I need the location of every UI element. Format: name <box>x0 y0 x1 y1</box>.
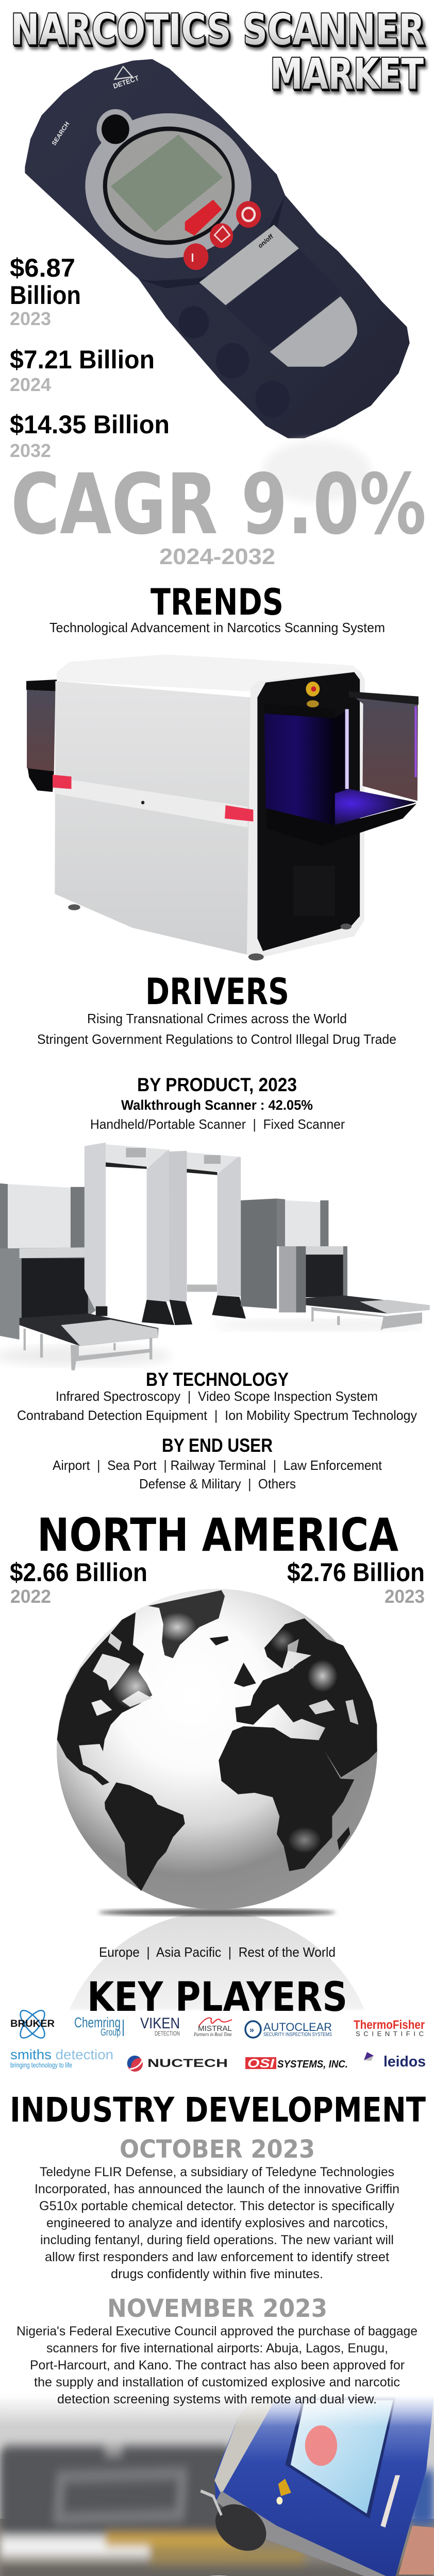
logo: mistral: Partners in Real Time <box>193 2032 232 2038</box>
logo: mistral <box>193 2018 232 2038</box>
globe reflection and shadow <box>57 1909 377 2232</box>
logo: leidos: leidos <box>383 2054 426 2070</box>
logo: osi systems: SYSTEMS, INC. <box>277 2059 348 2070</box>
trend text: Technological Advancement in Narcotics Scanning System <box>49 620 385 635</box>
by product section: Walkthrough Scanner : 42.05% <box>121 1097 313 1113</box>
by product section: Handheld/Portable Scanner | Fixed Scanner <box>90 1116 345 1132</box>
logo: smiths detection: smiths detection <box>10 2047 113 2062</box>
development: october 2023: engineered to analyze and identify explosives and narcotics, <box>46 2216 388 2230</box>
stat: 2023 market size: $6.87 <box>10 253 75 282</box>
land: south america <box>105 1783 185 1891</box>
lower panels <box>199 225 299 305</box>
cagr: 2024-2032 <box>159 544 275 569</box>
gate 2 <box>187 1153 241 1174</box>
logo: chemring: Chemring <box>74 2014 121 2030</box>
other regions: Europe | Asia Pacific | Rest of the World <box>99 1944 336 1960</box>
logo: thermo fisher: SCIENTIFIC <box>356 2030 424 2038</box>
by end user section: Airport | Sea Port | Railway Terminal | Law Enforcement <box>53 1458 382 1473</box>
development: november 2023: scanners for five international airports: Abuja, Lagos, Enugu, <box>46 2341 388 2355</box>
red indicator lights <box>53 775 253 822</box>
development: october 2023: allow first responders and law enforcement to identify street <box>45 2250 389 2264</box>
development: november 2023: the supply and installation of customized explosive and narcotic <box>34 2375 400 2389</box>
stat: north america 2022: 2022 <box>10 1586 51 1607</box>
left machine <box>0 1183 8 1249</box>
image: handheld narcotics scanner device <box>25 59 410 438</box>
logo: nuctech: NUCTECH <box>147 2057 228 2070</box>
land: uk <box>234 1663 256 1687</box>
development: november 2023 <box>16 2294 418 2406</box>
stat: 2023 market size <box>10 253 81 329</box>
right machine <box>241 1198 277 1309</box>
logo: smiths detection: bringing technology to life <box>10 2061 72 2069</box>
image: handheld narcotics scanner device: DETECT <box>112 74 140 90</box>
logo: leidos <box>364 2052 426 2070</box>
logo: bruker <box>10 2007 55 2042</box>
development: november 2023: Nigeria's Federal Executive Council approved the purchase of baggage <box>16 2324 418 2338</box>
land: greenland <box>148 1590 225 1658</box>
red button bar <box>185 199 222 235</box>
stat: 2023 market size: Billion <box>10 281 81 310</box>
by end user section <box>53 1435 382 1492</box>
by technology section: Infrared Spectroscopy | Video Scope Inspection System <box>56 1388 378 1404</box>
logo: viken: VIKEN <box>140 2015 180 2032</box>
image: handheld narcotics scanner device: I <box>191 251 194 264</box>
round red buttons <box>183 201 261 270</box>
land: africa <box>219 1726 354 1871</box>
stat: north america 2023 <box>287 1558 425 1607</box>
logo: autoclear: SECURITY INSPECTION SYSTEMS <box>263 2032 332 2038</box>
hudson bay and lakes <box>93 1654 130 1691</box>
development: november 2023: Port-Harcourt, and Kano. The contract has also been approved for <box>30 2358 405 2372</box>
development: october 2023: G510x portable chemical detector. This detector is specifically <box>39 2199 395 2213</box>
heading: drivers: DRIVERS <box>145 971 289 1013</box>
stat: north america 2023: 2023 <box>385 1586 425 1607</box>
logo: viken <box>140 2015 180 2037</box>
image: x-ray baggage scanner <box>26 654 419 960</box>
logo: osi systems <box>245 2057 348 2071</box>
logo: viken: DETECTION <box>155 2030 180 2037</box>
lcd screen <box>111 134 223 232</box>
logo: autoclear <box>245 2021 332 2038</box>
logo: chemring: Group <box>101 2027 121 2038</box>
drivers list <box>37 1011 396 1047</box>
logo: nuctech <box>127 2056 228 2072</box>
land: eurasia <box>235 1618 377 1777</box>
gate 1 <box>85 1143 106 1311</box>
drivers list: Rising Transnational Crimes across the World <box>87 1011 347 1026</box>
land: iceland <box>210 1636 229 1646</box>
title <box>11 6 425 99</box>
by end user section: Defense & Military | Others <box>139 1476 296 1492</box>
stat: north america 2023: $2.76 Billion <box>287 1558 425 1587</box>
by product section <box>90 1074 345 1132</box>
black sea and caspian sea <box>309 1700 335 1715</box>
stat: 2032 market size <box>10 410 170 461</box>
logo: bruker: BRUKER <box>10 2019 55 2029</box>
development: october 2023: Teledyne FLIR Defense, a subsidiary of Teledyne Technologies <box>40 2165 394 2179</box>
development: october 2023: drugs confidently within five minutes. <box>111 2267 323 2281</box>
development: october 2023: OCTOBER 2023 <box>120 2135 315 2164</box>
logo: autoclear: AUTOCLEAR <box>263 2021 332 2033</box>
logo: autoclear: » <box>249 2026 254 2035</box>
logo: thermo fisher <box>354 2018 425 2038</box>
stat: 2024 market size: $7.21 Billion <box>10 345 155 374</box>
by end user section: BY END USER <box>162 1435 273 1456</box>
stat: north america 2022: $2.66 Billion <box>10 1558 147 1587</box>
drivers list: Stringent Government Regulations to Control Illegal Drug Trade <box>37 1031 396 1047</box>
logos: key players <box>10 2007 426 2072</box>
development: november 2023: NOVEMBER 2023 <box>107 2294 327 2323</box>
by technology section: Contraband Detection Equipment | Ion Mobility Spectrum Technology <box>17 1408 417 1423</box>
logo: mistral: MISTRAL <box>198 2024 232 2033</box>
by technology section <box>17 1369 417 1423</box>
stat: 2024 market size: 2024 <box>10 374 51 395</box>
development: october 2023: including fentanyl, during field operations. The new variant will <box>40 2233 394 2247</box>
icon: globe <box>57 1589 377 1909</box>
development: october 2023 <box>35 2135 399 2281</box>
logo: thermo fisher: ThermoFisher <box>354 2018 425 2032</box>
heading: key players: KEY PLAYERS <box>87 1974 347 2021</box>
image: handheld narcotics scanner device: SEARCH <box>51 120 71 147</box>
land: north america <box>57 1613 152 1785</box>
stat: 2023 market size: 2023 <box>10 308 51 329</box>
heading: trends: TRENDS <box>151 581 283 623</box>
stat: north america 2022 <box>10 1558 147 1607</box>
development: october 2023: Incorporated, has announced the launch of the innovative Griffin <box>35 2182 399 2196</box>
image: walkthrough gates and baggage scanners <box>0 1143 429 1370</box>
logo: osi systems: OSI <box>247 2057 275 2071</box>
logo: smiths detection <box>10 2047 113 2069</box>
land: madagascar <box>337 1827 350 1851</box>
glossy highlights <box>158 1613 196 1642</box>
image: handheld detector photo <box>0 2395 434 2576</box>
logo: chemring <box>74 2014 124 2038</box>
development: november 2023: detection screening systems with remote and dual view. <box>57 2392 377 2406</box>
stat: 2032 market size: 2032 <box>10 440 51 461</box>
stat: 2024 market size <box>10 345 155 395</box>
stat: 2032 market size: $14.35 Billion <box>10 410 170 439</box>
by technology section: BY TECHNOLOGY <box>146 1369 289 1390</box>
image: handheld narcotics scanner device: on/off <box>257 232 275 250</box>
device reflection <box>263 440 371 502</box>
by product section: BY PRODUCT, 2023 <box>137 1074 297 1095</box>
